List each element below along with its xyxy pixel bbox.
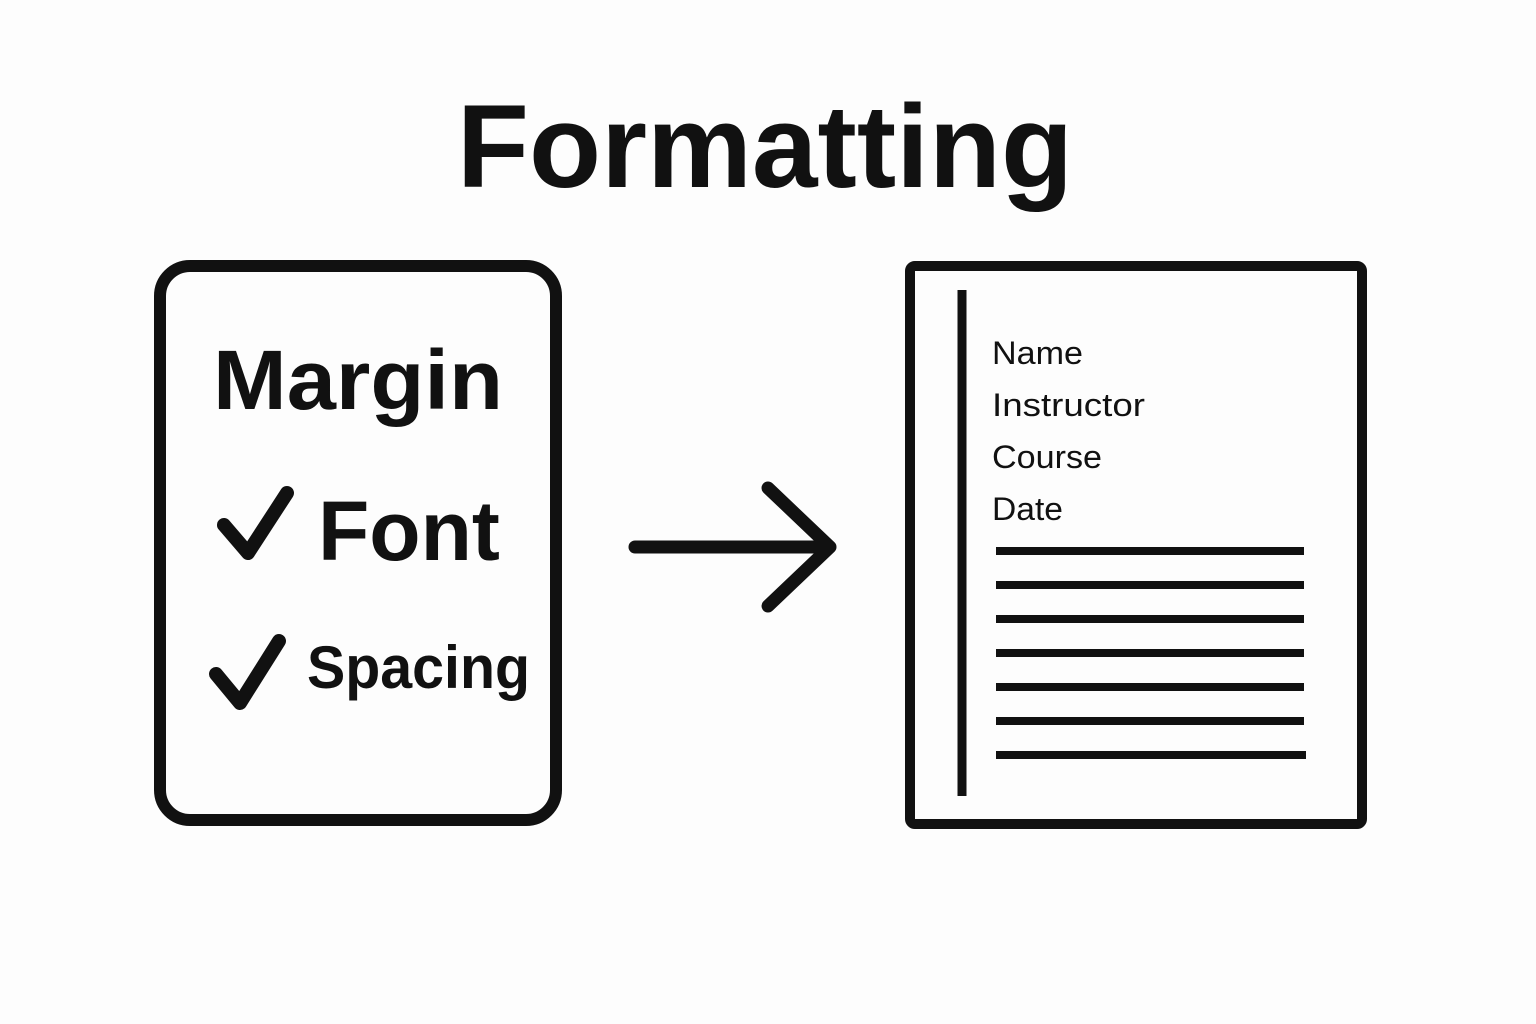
body lines: [996, 551, 1306, 755]
text: spacing: Spacing: [307, 634, 530, 701]
arrow: [635, 488, 830, 606]
text: font: Font: [318, 484, 500, 578]
panel: checklist: [160, 266, 556, 820]
header text block: Instructor: [992, 387, 1145, 423]
margin line: [958, 290, 966, 796]
icon: check spacing: [216, 641, 279, 703]
header text block: Date: [992, 491, 1063, 527]
icon: check font: [224, 493, 287, 553]
panel: document: [910, 266, 1362, 824]
heading: margin: Margin: [213, 333, 503, 427]
title: Formatting: [457, 81, 1073, 213]
header text block: Name: [992, 335, 1083, 371]
header text block: Course: [992, 439, 1102, 475]
header text block: [992, 335, 1145, 527]
